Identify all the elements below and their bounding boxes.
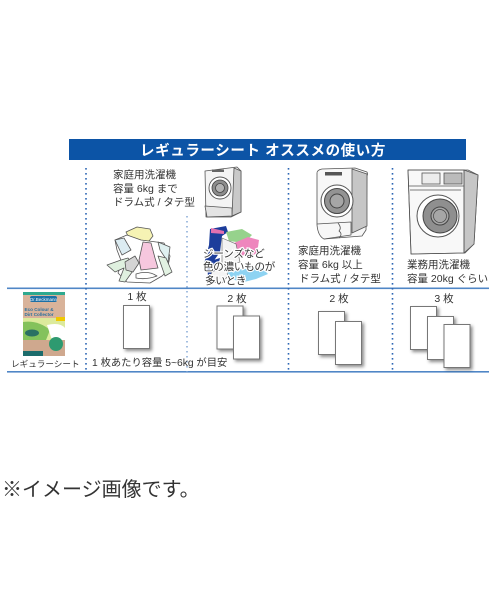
column 1: one sheet: 1 枚 [127,290,147,303]
title banner: レギュラーシート オススメの使い方 [140,142,386,160]
footnote: ※イメージ画像です。 [2,478,200,501]
text: large home washer spec: 家庭用洗濯機 [298,244,361,257]
column 3: two sheets [318,292,362,364]
label: regular sheet: レギュラーシート [11,359,80,369]
column 2: two sheets [217,292,260,359]
text: small home washer spec: ドラム式 / タテ型 [113,196,195,208]
icon: small front-load washer [205,167,241,217]
icon: pile of dark clothes with label: 色の濃いものが [203,260,276,273]
icon: pile of dark clothes with label: 多いとき [205,274,246,287]
icon: pile of dark clothes with label [203,226,276,287]
column 4: three sheets: 3 枚 [434,292,454,305]
column 4: three sheets [410,292,470,368]
text: small home washer spec [113,168,195,208]
table grid lines [7,168,489,373]
product package: regular sheet: Dr.Beckmann [30,297,58,302]
product package: regular sheet [23,292,65,356]
product package: regular sheet: Eco Colour & [24,307,54,312]
icon: large home washer [317,168,368,239]
title banner [69,139,466,160]
column 2: two sheets: 2 枚 [227,292,247,305]
text: commercial washer spec [407,258,488,285]
note: capacity per sheet: 1 枚あたり容量 5~6kg が目安 [92,356,227,369]
text: large home washer spec: 容量 6kg 以上 [298,258,363,271]
text: small home washer spec: 容量 6kg まで [113,182,178,195]
text: commercial washer spec: 業務用洗濯機 [407,258,470,271]
text: large home washer spec: ドラム式 / タテ型 [299,272,381,285]
text: small home washer spec: 家庭用洗濯機 [113,168,176,181]
product package: regular sheet: Dirt Collector [24,312,54,317]
icon: commercial washer [408,170,478,254]
icon: pile of light clothes [107,227,172,283]
text: large home washer spec [298,244,381,285]
column 3: two sheets: 2 枚 [329,292,349,305]
text: commercial washer spec: 容量 20kg ぐらい [407,272,488,285]
icon: pile of dark clothes with label: ジーンズなど [203,247,265,260]
column 1: one sheet [124,290,150,348]
